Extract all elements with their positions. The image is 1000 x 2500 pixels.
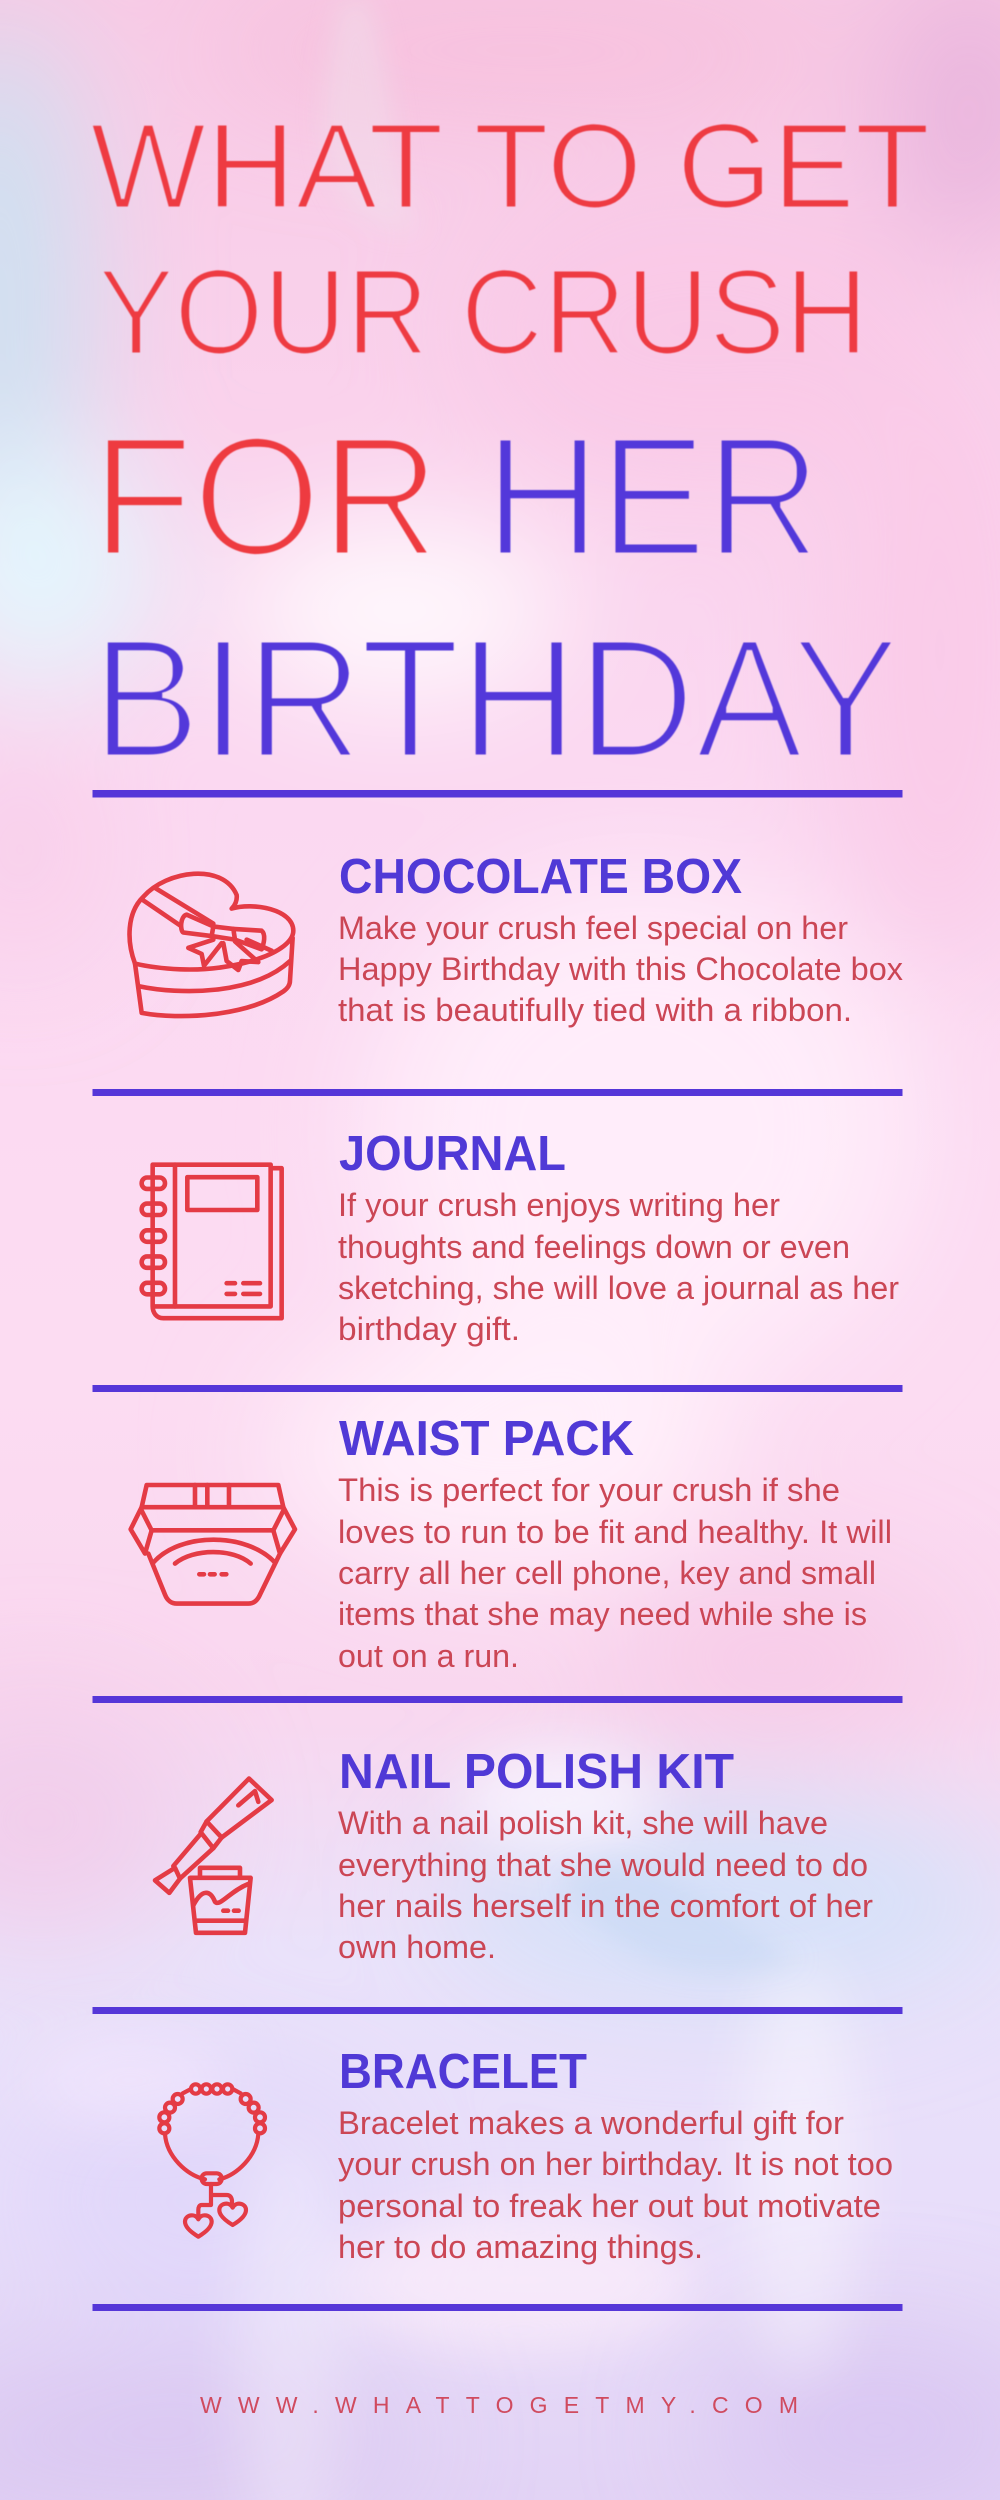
footer: website URL: WWW.WHATTOGETMY.COM	[200, 2392, 798, 2418]
description: nail polish kit: everything that she would need to do	[338, 1847, 868, 1883]
panel: waist pack	[131, 1412, 892, 1674]
title	[90, 98, 930, 794]
description: journal: sketching, she will love a journal as her	[338, 1270, 899, 1306]
description: waist pack: loves to run to be fit and healthy. It will	[338, 1514, 892, 1550]
description: waist pack	[338, 1472, 892, 1674]
description: bracelet: her to do amazing things.	[338, 2229, 703, 2265]
description: nail polish kit	[338, 1805, 873, 1965]
panel: nail polish kit	[155, 1745, 873, 1965]
description: bracelet: your crush on her birthday. It is not too	[338, 2146, 893, 2182]
panel: chocolate box	[130, 850, 903, 1028]
description: waist pack: out on a run.	[338, 1638, 519, 1674]
icon: heart chocolate box	[130, 874, 293, 1016]
title word: FOR: FOR	[92, 402, 440, 592]
title word: HER: HER	[485, 402, 821, 592]
icon: waist pack	[131, 1485, 295, 1604]
title line: WHAT TO GET: WHAT TO GET	[90, 98, 930, 234]
description: journal: thoughts and feelings down or even	[338, 1229, 850, 1265]
description: waist pack: carry all her cell phone, key and small	[338, 1555, 876, 1591]
description: journal	[338, 1187, 899, 1347]
panel: bracelet	[159, 2045, 893, 2265]
icon: bead bracelet with hearts	[159, 2084, 265, 2237]
description: bracelet	[338, 2105, 893, 2265]
description: nail polish kit: With a nail polish kit, she will have	[338, 1805, 828, 1841]
description: bracelet: personal to freak her out but motivate	[338, 2188, 881, 2224]
heading: chocolate box: CHOCOLATE BOX	[339, 850, 742, 904]
description: chocolate box	[338, 910, 903, 1028]
icon: nail polish brush and jar	[155, 1779, 272, 1933]
heading: bracelet: BRACELET	[339, 2045, 587, 2099]
description: nail polish kit: own home.	[338, 1929, 496, 1965]
heading: journal: JOURNAL	[339, 1127, 566, 1181]
heading: waist pack: WAIST PACK	[339, 1412, 634, 1466]
icon: spiral journal	[142, 1165, 282, 1318]
title line: YOUR CRUSH: YOUR CRUSH	[98, 244, 868, 380]
description: waist pack: This is perfect for your crush if she	[338, 1472, 840, 1508]
title line: BIRTHDAY: BIRTHDAY	[92, 604, 900, 794]
description: journal: birthday gift.	[338, 1311, 520, 1347]
description: waist pack: items that she may need while she is	[338, 1596, 867, 1632]
description: nail polish kit: her nails herself in the comfort of her	[338, 1888, 873, 1924]
description: chocolate box: Happy Birthday with this Chocolate box	[338, 951, 903, 987]
description: journal: If your crush enjoys writing her	[338, 1187, 780, 1223]
description: bracelet: Bracelet makes a wonderful gift for	[338, 2105, 844, 2141]
description: chocolate box: Make your crush feel special on her	[338, 910, 848, 946]
panel: journal	[142, 1127, 899, 1347]
heading: nail polish kit: NAIL POLISH KIT	[339, 1745, 734, 1799]
description: chocolate box: that is beautifully tied with a ribbon.	[338, 992, 852, 1028]
